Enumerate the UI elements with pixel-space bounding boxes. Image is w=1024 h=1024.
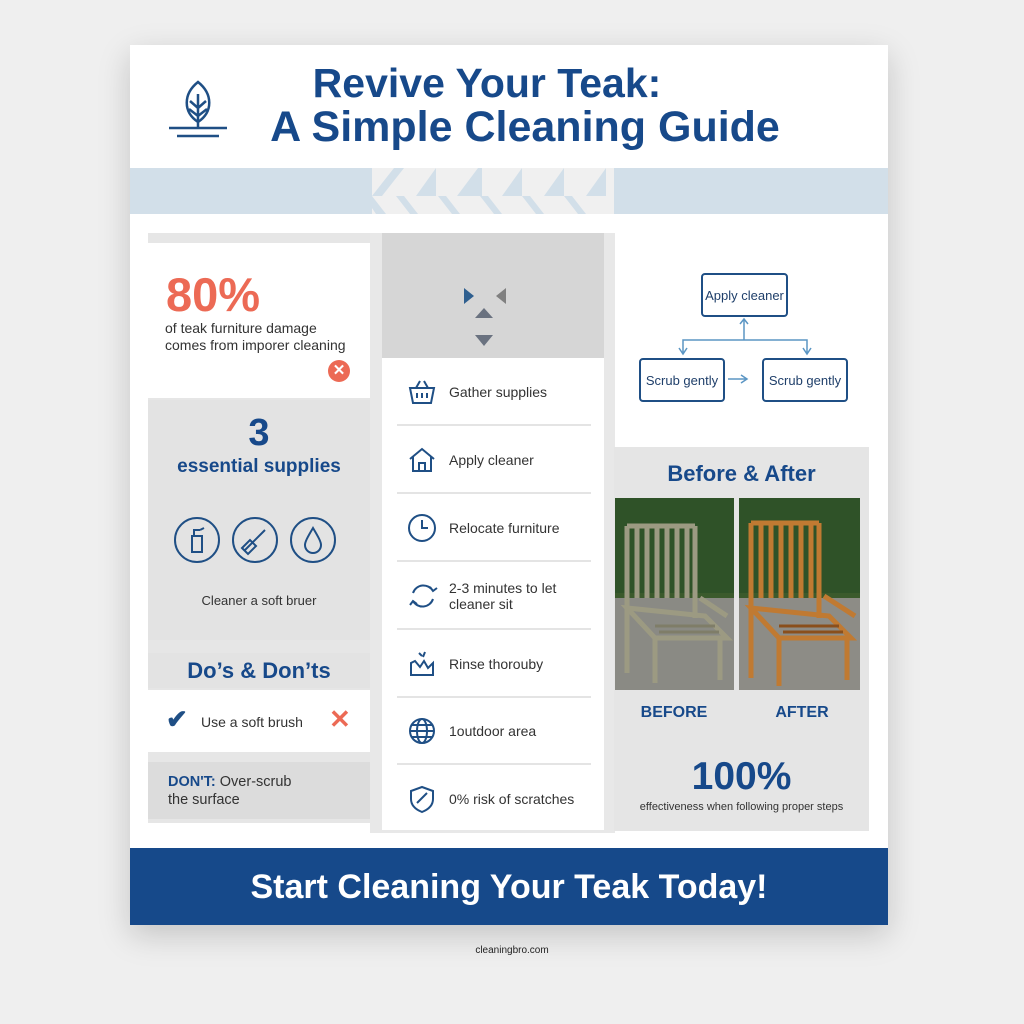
step: apply — [397, 427, 591, 494]
panel: 3 essential supplies — [148, 400, 370, 640]
box: scrub gently 1: Scrub gently — [646, 372, 718, 388]
step: rinse: Rinse thorouby — [449, 656, 543, 672]
step: scratches: 0% risk of scratches — [449, 790, 574, 806]
icon: red x circle: ✕ — [333, 362, 345, 379]
step: minutes: 2-3 minutes to let — [449, 580, 556, 596]
step: apply: Apply cleaner — [449, 452, 534, 468]
step: outdoor: 1outdoor area — [449, 722, 536, 738]
panel: before & after: BEFORE — [641, 704, 707, 721]
panel: 80% stat: 80% — [166, 268, 260, 321]
icon: leaf logo — [169, 80, 227, 138]
photo: before — [615, 498, 734, 690]
icons: supplies — [174, 517, 336, 563]
panel: do's and don'ts: the surface — [168, 792, 240, 808]
panel: 3 essential supplies: 3 — [248, 412, 270, 454]
box: scrub gently 2: Scrub gently — [769, 372, 841, 388]
panel: before & after: effectiveness when following proper steps — [640, 801, 843, 813]
step: minutes: cleaner sit — [449, 596, 513, 612]
footer banner — [130, 848, 888, 925]
step: minutes — [397, 563, 591, 630]
box: apply cleaner: Apply cleaner — [705, 288, 784, 302]
box: apply cleaner — [701, 273, 788, 317]
step: outdoor — [397, 698, 591, 765]
step: relocate: Relocate furniture — [449, 520, 560, 536]
left column backdrop — [148, 233, 370, 823]
panel: do's and don'ts: ✕ — [329, 704, 351, 734]
panel: do's and don'ts: Do’s & Don’ts — [187, 658, 331, 683]
photo: after — [739, 498, 860, 690]
step: gather — [397, 359, 591, 426]
band with pattern — [130, 168, 888, 214]
panel: steps list — [382, 358, 604, 830]
panel: 3 essential supplies: Cleaner a soft bruer — [202, 593, 316, 608]
panel: before & after: Before & After — [667, 461, 816, 486]
panel: before & after — [614, 447, 869, 831]
panel: do's and don'ts — [148, 658, 370, 819]
url: cleaningbro.com — [475, 945, 549, 956]
box: scrub gently 1 — [639, 358, 725, 402]
panel: before & after: AFTER — [775, 704, 829, 721]
step: rinse — [397, 631, 591, 698]
panel: do's and don'ts: Use a soft brush — [201, 714, 303, 730]
title: Revive Your Teak: — [313, 60, 661, 106]
panel: triangles header — [382, 233, 604, 358]
panel: do's and don'ts: ✔ — [166, 704, 188, 734]
panel: 3 essential supplies: essential supplies — [177, 456, 341, 477]
card — [130, 45, 888, 925]
title — [270, 60, 780, 151]
footer banner: Start Cleaning Your Teak Today! — [250, 868, 768, 906]
icon: red x circle — [328, 360, 350, 382]
step: gather: Gather supplies — [449, 384, 547, 400]
box: scrub gently 2 — [762, 358, 848, 402]
panel: 80% stat: comes from imporer cleaning — [165, 337, 346, 353]
panel: 80% stat: of teak furniture damage — [165, 320, 317, 336]
step: scratches — [410, 786, 574, 814]
middle column — [370, 233, 615, 833]
flowchart — [639, 273, 848, 402]
title: A Simple Cleaning Guide — [270, 103, 780, 151]
panel: before & after: 100% — [692, 755, 791, 798]
panel: do's and don'ts: DON'T: Over-scrub — [168, 774, 292, 790]
step: relocate — [397, 495, 591, 562]
panel: 80% stat — [148, 243, 370, 398]
